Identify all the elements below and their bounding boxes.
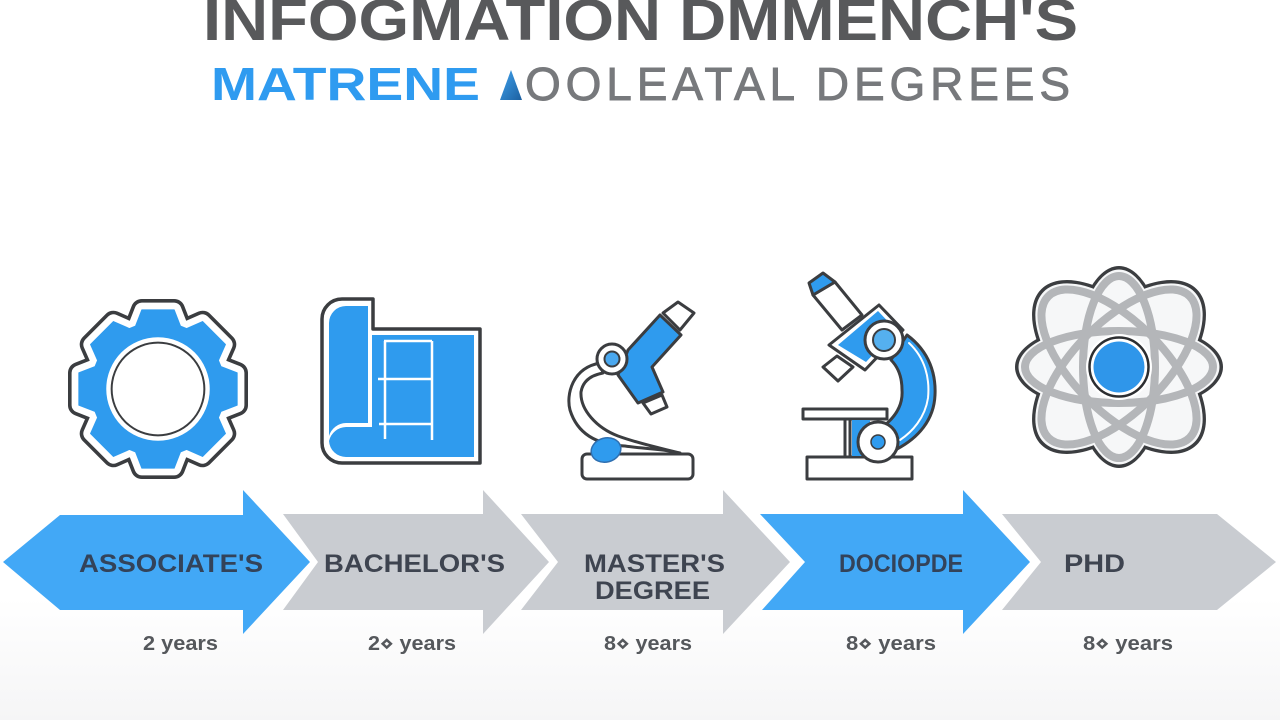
icon: gear <box>79 310 237 468</box>
duration: master's: 8⋄ years <box>604 633 692 655</box>
arrow: master's degree <box>521 490 790 634</box>
label: doctorate: DOCIOPDE <box>839 550 963 578</box>
subtitle: grey words: OOLEATAL DEGREES <box>525 58 1070 110</box>
arrow: doctorate <box>760 490 1030 634</box>
icon: microscope large <box>803 273 935 479</box>
icon: blueprint <box>322 299 480 463</box>
label: phd: PHD <box>1064 550 1125 578</box>
icon: atom <box>1002 250 1236 484</box>
arrow: bachelor's <box>283 490 549 634</box>
label: master's degree: MASTER'S <box>584 550 725 578</box>
subtitle: blue word: MATRENE <box>211 58 480 110</box>
label: bachelor's: BACHELOR'S <box>324 550 505 578</box>
arrow: associate's <box>3 490 310 634</box>
label: associate's: ASSOCIATE'S <box>79 550 263 578</box>
duration: doctorate: 8⋄ years <box>846 633 936 655</box>
duration: phd: 8⋄ years <box>1083 633 1173 655</box>
title <box>203 0 1078 110</box>
icon: microscope small <box>569 302 694 479</box>
subtitle: triangle mark <box>500 70 522 100</box>
duration: bachelor's: 2⋄ years <box>368 633 456 655</box>
duration: associate's: 2 years <box>143 633 218 655</box>
label: master's degree: DEGREE <box>595 577 710 605</box>
arrow: phd <box>1002 514 1276 610</box>
duration labels <box>143 633 1173 655</box>
